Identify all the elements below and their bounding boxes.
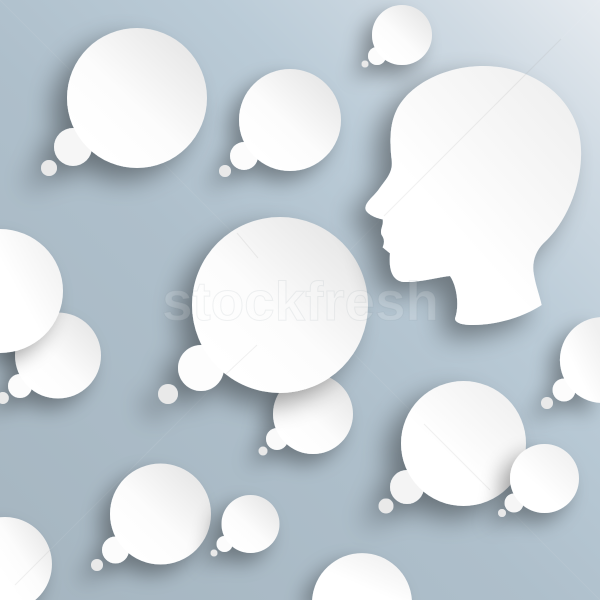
thought bubble: top left (41, 28, 207, 176)
thought bubble: small top (362, 5, 432, 68)
thought bubble: bottom left medium (91, 464, 211, 571)
thought bubble: top middle (219, 69, 341, 177)
thought bubble: lower right small (498, 444, 579, 517)
thought bubble: centre large (158, 217, 368, 404)
thought bubble: left back (0, 312, 101, 404)
thought bubble: left front (0, 229, 63, 353)
thought bubble: right edge (541, 317, 600, 409)
thought bubble: bottom edge (312, 553, 412, 600)
human head silhouette (365, 66, 581, 325)
thought bubble: bottom left corner (0, 517, 52, 600)
thought bubble: bottom small (210, 495, 280, 556)
watermark text: stockfresh (162, 270, 439, 332)
thought bubble: behind centre (258, 374, 353, 456)
thought bubble: lower right large (378, 381, 526, 514)
